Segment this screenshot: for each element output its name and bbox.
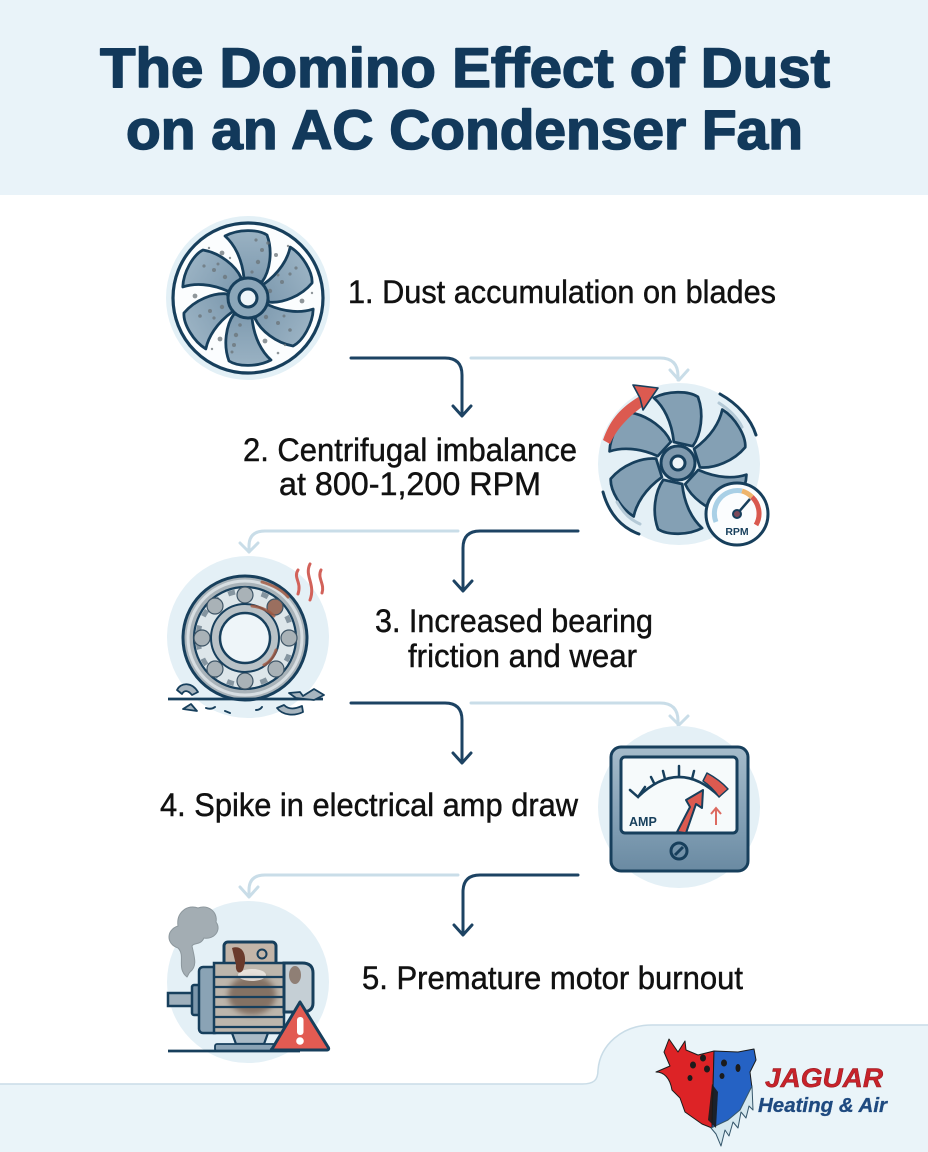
step 2 text: 2. Centrifugal imbalance (243, 432, 577, 468)
step 3 text: friction and wear (408, 638, 637, 674)
title: on an AC Condenser Fan (126, 98, 803, 161)
title: The Domino Effect of Dust (100, 36, 830, 99)
step 3 text: 3. Increased bearing (375, 603, 653, 639)
icon: amp meter (598, 726, 760, 888)
red rotation arrow (603, 396, 646, 444)
step 4 text: 4. Spike in electrical amp draw (160, 787, 579, 823)
arrow: to motor icon (240, 875, 458, 897)
smoke (169, 907, 218, 977)
logo mark: jaguar head (656, 1039, 756, 1146)
icon: spinning fan with RPM gauge: RPM (725, 526, 749, 538)
footer band with logo tab (0, 1025, 928, 1152)
icon: amp meter: AMP (629, 815, 657, 829)
arrow: to fan icon (471, 358, 688, 380)
arrow: step 3 to step 4 (351, 703, 471, 763)
icon: worn bearing with heat (167, 556, 329, 718)
step 1 text: 1. Dust accumulation on blades (348, 274, 776, 310)
arrow: step 1 to step 2 (351, 358, 471, 416)
step 2 text (243, 432, 577, 502)
step 5 text: 5. Premature motor burnout (362, 960, 743, 996)
step 2 text: at 800-1,200 RPM (279, 466, 541, 502)
arrow: to amp meter (471, 703, 688, 725)
icon: spinning fan with RPM gauge (598, 383, 768, 545)
logo: Jaguar Heating & Air: Heating & Air (758, 1095, 888, 1117)
logo: Jaguar Heating & Air (656, 1039, 888, 1146)
arrow: to bearing icon (240, 531, 458, 552)
header band (0, 0, 928, 195)
arrow: step 2 to step 3 (454, 531, 578, 591)
step 3 text (375, 603, 653, 674)
arrow: step 4 to step 5 (454, 875, 578, 935)
logo wordmark: JAGUAR (765, 1063, 884, 1093)
title (100, 36, 830, 161)
icon: burned motor with warning (167, 901, 329, 1063)
icon: dusty fan blades (166, 216, 330, 380)
